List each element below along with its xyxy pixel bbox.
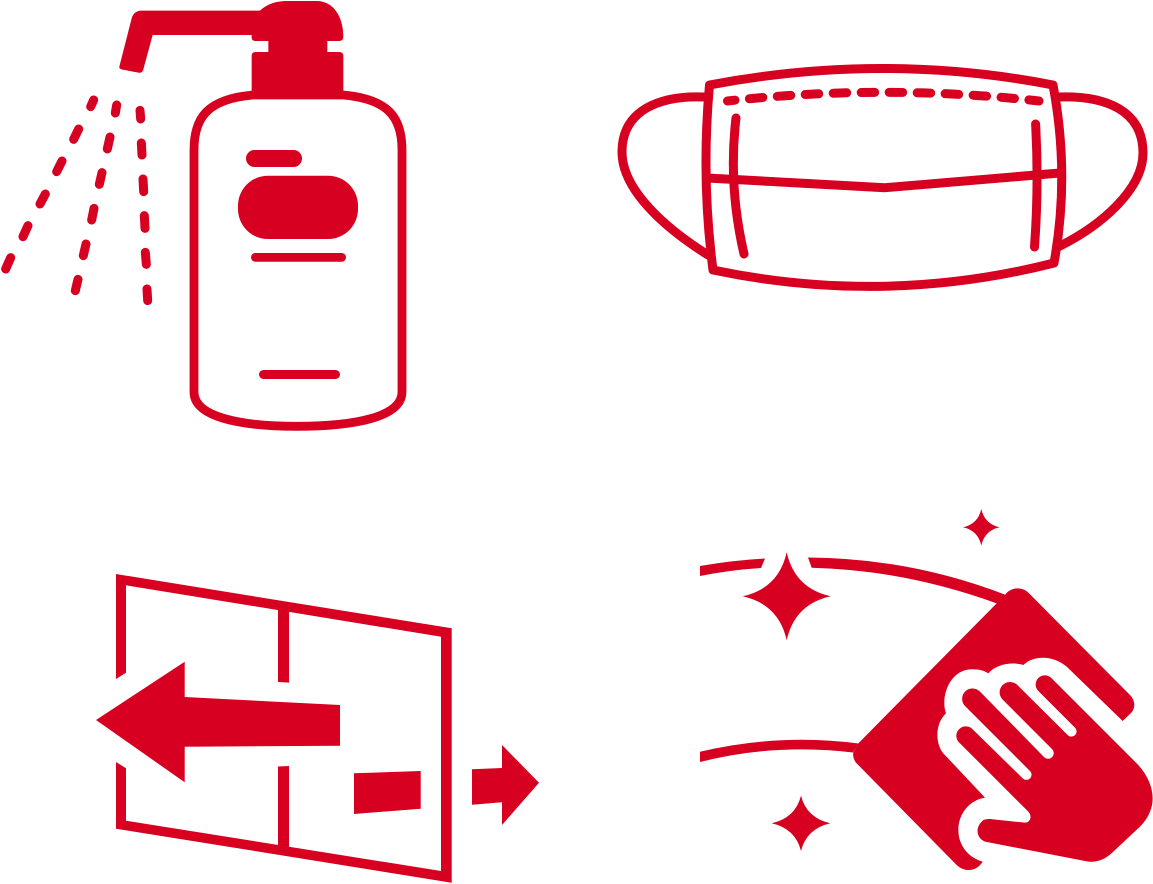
bottle body outline (194, 95, 402, 426)
bottle label: small pill (246, 150, 302, 167)
outward arrow head (472, 745, 539, 825)
cloth (853, 588, 1134, 870)
icon: sanitizer pump bottle with spray (6, 1, 402, 426)
wiped streak top left (700, 558, 765, 576)
large inward arrow (96, 662, 340, 782)
right ear loop (1057, 97, 1143, 246)
bottle label: lower line (259, 370, 340, 379)
left pleat (733, 118, 744, 254)
wiped streak top right (808, 558, 1006, 604)
stitched top seam (728, 92, 1039, 101)
sparkle top small (963, 509, 1000, 546)
bottle label: large pill (238, 176, 358, 239)
mask body (706, 68, 1062, 286)
sparkle large (743, 552, 831, 640)
wiped streak lower (700, 740, 858, 762)
sparkle bottom (772, 796, 830, 851)
window mullion upper (278, 608, 289, 683)
icon: window ventilation with airflow arrows (96, 574, 539, 883)
hand with fingers (956, 675, 1153, 862)
spray droplets (6, 100, 148, 301)
window mullion lower (278, 766, 289, 848)
pump head and nozzle (119, 1, 343, 93)
outward arrow tail (354, 771, 421, 814)
centre fold (707, 173, 1060, 188)
icon: surgical face mask (622, 68, 1143, 286)
right pleat (1034, 124, 1037, 247)
left ear loop (622, 97, 708, 255)
bottle label: upper line (251, 253, 346, 262)
icon: hand wiping a surface with cloth (700, 509, 1153, 870)
window frame (116, 574, 452, 883)
